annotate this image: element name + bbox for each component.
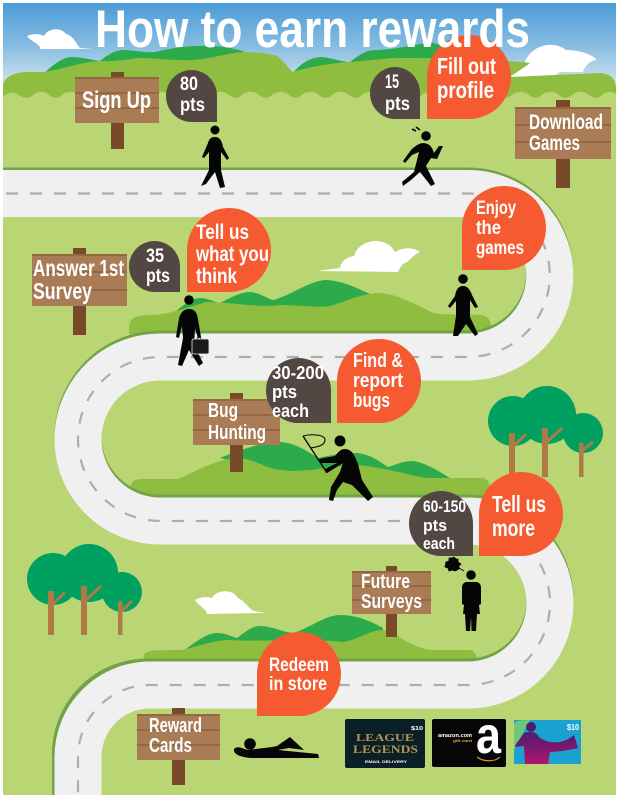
gift card: League of Legends: $10 (411, 726, 423, 732)
cloud: middle (317, 241, 420, 272)
bubble: Find and report bugs: report (353, 370, 403, 392)
bubble: 15 pts: pts (385, 94, 410, 115)
bubble: Tell us what you think: think (196, 265, 237, 288)
person: walking (sign up) (201, 126, 229, 188)
bubble: 60-150 pts each: 60-150 (423, 497, 466, 516)
gift card: Amazon (432, 719, 506, 767)
gift card: iTunes: $10 (567, 723, 579, 732)
road (0, 191, 550, 800)
bubble: Tell us more: Tell us (492, 491, 546, 517)
bubble: 80 pts (166, 70, 217, 122)
bubble: Find and report bugs (337, 339, 421, 423)
bubble: 35 pts: 35 (146, 246, 164, 267)
bubble: 30-200 pts each (266, 358, 331, 423)
sign: Bug Hunting: Hunting (208, 422, 266, 444)
gift card: iTunes (514, 720, 581, 764)
gift card: League of Legends: EMAIL DELIVERY (365, 759, 407, 764)
sign: Reward Cards: Cards (149, 735, 192, 757)
bubble: Enjoy the games: games (476, 238, 524, 259)
person: woman with thought bubble (445, 557, 481, 631)
bubble: 60-150 pts each: each (423, 534, 455, 553)
bubble: 15 pts: 15 (385, 72, 399, 93)
gift card: League of Legends: LEAGUE (356, 732, 414, 744)
bubble: 80 pts: 80 (180, 74, 198, 95)
sign: Bug Hunting (193, 393, 280, 472)
bubble: Tell us what you think (187, 208, 271, 292)
sign: Reward Cards (137, 708, 220, 785)
sign: Bug Hunting: Bug (208, 400, 238, 422)
bubble: Enjoy the games: the (476, 218, 501, 239)
bubble: Fill out profile (427, 35, 511, 119)
bubble: Tell us what you think: Tell us (196, 221, 249, 244)
trees: right cluster (488, 386, 603, 478)
hill group: lower (143, 615, 477, 662)
bubble: Enjoy the games: Enjoy (476, 198, 516, 219)
bubble: Fill out profile: profile (437, 77, 494, 103)
bubble: Tell us more (479, 472, 563, 556)
sign: Future Surveys (352, 566, 431, 637)
bubble: 60-150 pts each (409, 491, 473, 556)
title: How to earn rewards (95, 0, 530, 59)
hill group: bug hunting (130, 442, 490, 496)
bubble: Enjoy the games (462, 186, 546, 270)
sign: Future Surveys: Surveys (361, 591, 422, 613)
sign: Answer 1st Survey: Answer 1st (33, 255, 124, 281)
bubble: Find and report bugs: bugs (353, 390, 390, 412)
trees: left cluster (27, 544, 142, 635)
bubble: 30-200 pts each: pts (272, 382, 297, 402)
sign: Future Surveys: Future (361, 571, 410, 593)
gift card: League of Legends (345, 719, 425, 768)
background: sky (3, 3, 616, 83)
sign: Reward Cards: Reward (149, 715, 202, 737)
person: running (fill out profile) (402, 127, 443, 186)
bubble: Redeem in store: in store (269, 674, 327, 695)
person: walking (enjoy the games) (448, 274, 478, 336)
sign: Download Games (515, 100, 611, 188)
bubble: Tell us more: more (492, 515, 535, 541)
cloud: top right (510, 45, 597, 77)
cloud: lower (195, 591, 266, 614)
bubble: Tell us what you think: what you (195, 243, 269, 266)
bubble: 30-200 pts each: each (272, 401, 309, 421)
bubble: 35 pts: pts (146, 266, 170, 287)
hedge scallops (3, 92, 616, 100)
sign: Sign Up: Sign Up (82, 87, 151, 114)
cloud: top left (27, 29, 93, 49)
bubble: Redeem in store: Redeem (269, 655, 329, 676)
gift card: Amazon: gift card (453, 738, 473, 743)
top hills: mid green (3, 52, 616, 100)
person: lying down (234, 737, 319, 758)
person: bug catcher with net (303, 435, 373, 501)
sign: Answer 1st Survey: Survey (33, 278, 92, 304)
gift card: Amazon: a (476, 707, 502, 765)
sign: Download Games: Games (529, 132, 580, 155)
bubble: 80 pts: pts (180, 95, 205, 116)
bubble: 60-150 pts each: pts (423, 516, 447, 535)
bubble: Redeem in store (257, 632, 341, 716)
bubble: 30-200 pts each: 30-200 (272, 363, 324, 383)
hill group: middle (129, 280, 491, 334)
bubble: 15 pts (370, 67, 420, 119)
top hills: dark green (46, 42, 441, 72)
gift card: Amazon: amazon.com (438, 733, 473, 739)
sign: Sign Up (75, 72, 159, 149)
gift card: League of Legends: LEGENDS (353, 742, 418, 756)
person: businessman with briefcase (176, 295, 209, 366)
bubble: Fill out profile: Fill out (437, 53, 496, 79)
sign: Answer 1st Survey (32, 248, 127, 335)
bubble: 35 pts (129, 241, 180, 292)
bubble: Find and report bugs: Find & (353, 350, 403, 372)
